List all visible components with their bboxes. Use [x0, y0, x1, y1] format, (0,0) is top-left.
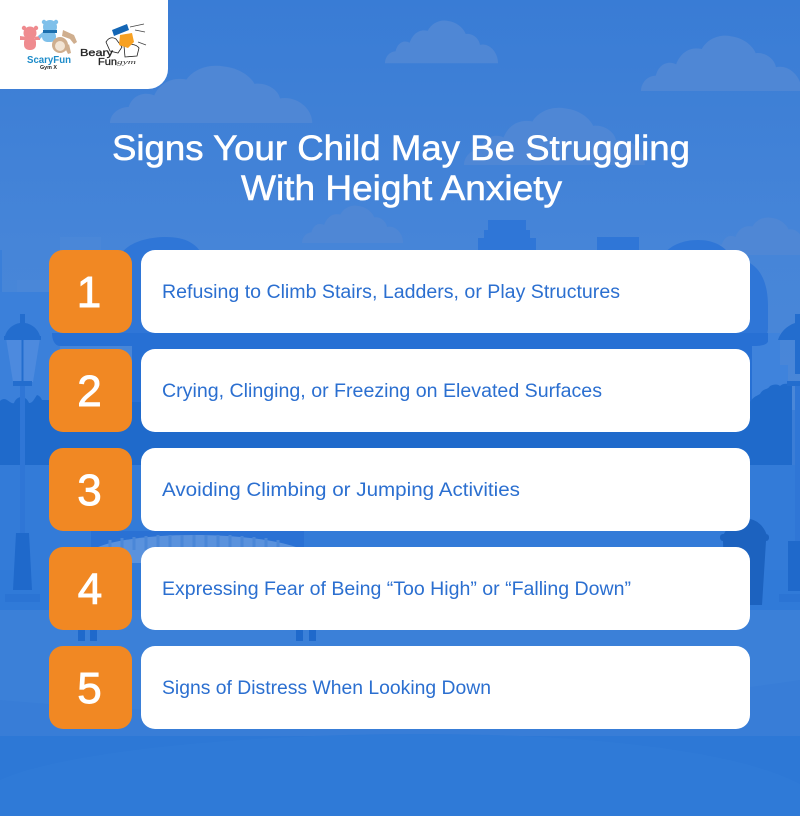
brand text: ScaryFun — [27, 54, 71, 66]
card 4 — [141, 547, 750, 630]
card 5 — [141, 646, 750, 729]
card 4: Expressing Fear of Being “Too High” or “Falling Down” — [162, 579, 631, 600]
card 2 — [141, 349, 750, 432]
number badge 1 — [49, 250, 132, 333]
logo: ScaryFun Gym X — [20, 20, 77, 71]
logo: Beary Fun Gym: gym — [117, 60, 137, 66]
card 3: Avoiding Climbing or Jumping Activities — [162, 480, 520, 501]
card 1: Refusing to Climb Stairs, Ladders, or Play Structures — [162, 282, 620, 303]
title: With Height Anxiety — [241, 169, 563, 208]
card 1 — [141, 250, 750, 333]
number badge 2 — [49, 349, 132, 432]
number badge 3 — [49, 448, 132, 531]
title: Signs Your Child May Be Struggling — [112, 129, 690, 168]
card 2: Crying, Clinging, or Freezing on Elevated Surfaces — [162, 381, 602, 402]
number badge 5 — [49, 646, 132, 729]
pink bear — [20, 26, 40, 50]
logo: Beary Fun Gym: Fun — [98, 56, 117, 68]
logo panel — [0, 0, 168, 89]
skyline — [0, 220, 788, 440]
item 3 — [49, 448, 750, 531]
hedge — [0, 384, 792, 465]
street lamp left — [4, 314, 41, 602]
tan bear — [52, 30, 77, 54]
title — [112, 129, 690, 208]
item 1 — [49, 250, 750, 333]
logo: Beary Fun Gym: Beary — [80, 47, 114, 59]
park bench — [78, 531, 316, 641]
number badge 4 — [49, 547, 132, 630]
logo: Beary Fun Gym — [80, 24, 146, 68]
number badge 3: 3 — [77, 466, 102, 515]
ground bands — [0, 465, 800, 615]
logo: ScaryFun Gym X: Gym X — [40, 65, 58, 71]
card 3 — [141, 448, 750, 531]
item 5 — [49, 646, 750, 729]
number badge 5: 5 — [77, 664, 102, 713]
card 5: Signs of Distress When Looking Down — [162, 678, 491, 699]
number badge 2: 2 — [77, 367, 102, 416]
clouds — [110, 21, 800, 255]
item 4 — [49, 547, 750, 630]
trash bin — [720, 519, 769, 605]
number badge 1: 1 — [77, 268, 101, 317]
blue bear — [38, 20, 58, 42]
number badge 4: 4 — [78, 565, 102, 614]
item 2 — [49, 349, 750, 432]
street lamp right — [778, 314, 800, 602]
